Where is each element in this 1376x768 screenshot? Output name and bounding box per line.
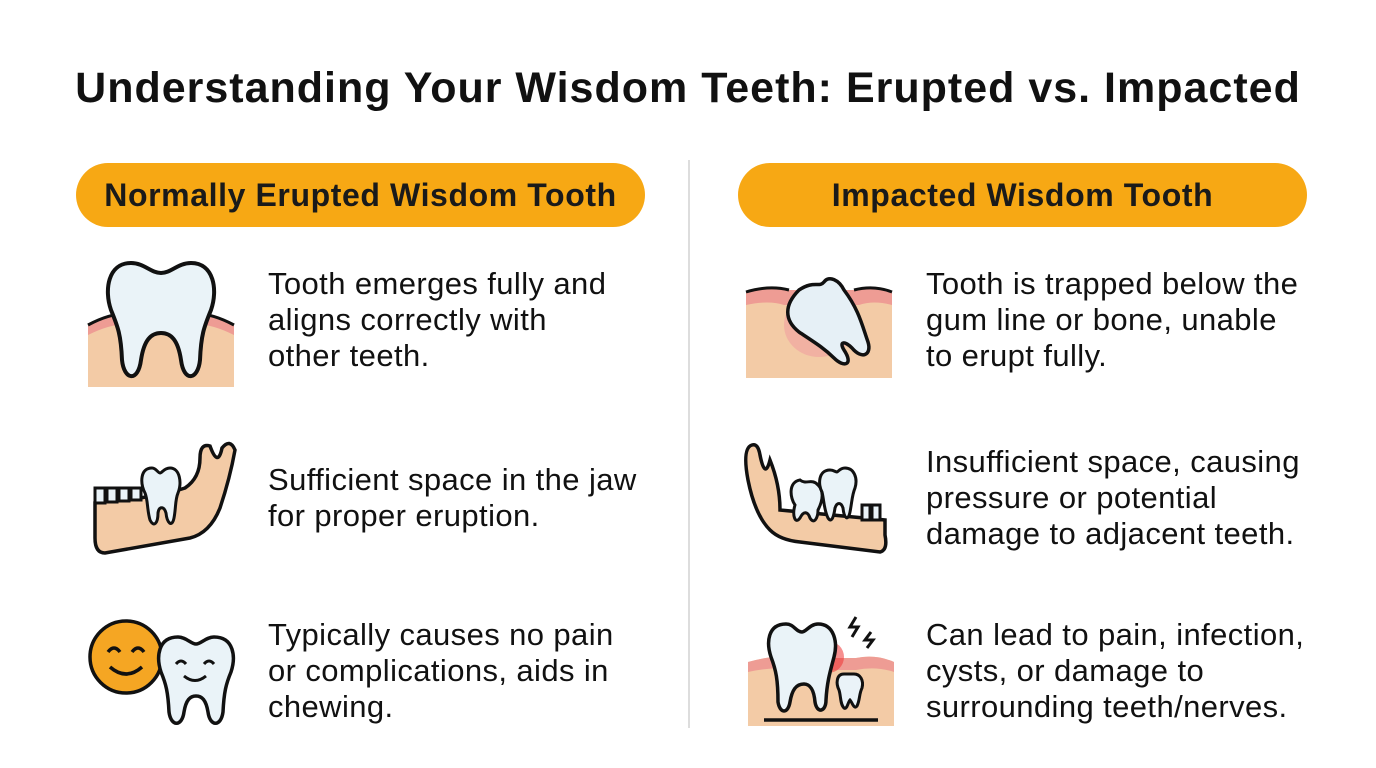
text: erupted 3 — [268, 617, 614, 724]
text: erupted 2 — [268, 462, 637, 533]
text: impacted 1 — [926, 266, 1298, 373]
icon: impacted tilted tooth — [746, 277, 892, 378]
title: Understanding Your Wisdom Teeth: Erupted vs. Impacted — [75, 64, 1301, 112]
text: erupted 2: Sufficient space in the jaw — [268, 462, 637, 497]
text: erupted 1 — [268, 266, 606, 373]
text: impacted 1: Tooth is trapped below the — [926, 266, 1298, 301]
icon: crowded jaw — [744, 443, 888, 554]
text: impacted 3: surrounding teeth/nerves. — [926, 689, 1288, 724]
icon: jaw with space — [93, 442, 237, 555]
text: impacted 3: Can lead to pain, infection, — [926, 617, 1304, 652]
text: erupted 3: chewing. — [268, 689, 394, 724]
text: erupted 3: or complications, aids in — [268, 653, 609, 688]
text: impacted 2: damage to adjacent teeth. — [926, 516, 1294, 551]
pill: erupted heading: Normally Erupted Wisdom Tooth — [104, 177, 617, 213]
text: impacted 2: Insufficient space, causing — [926, 444, 1300, 479]
text: impacted 1: gum line or bone, unable — [926, 302, 1277, 337]
pill: impacted heading — [738, 163, 1307, 227]
icon: pain and infection — [748, 616, 894, 726]
pill: erupted heading — [76, 163, 645, 227]
icon: erupted tooth in gum — [87, 261, 235, 387]
pill: impacted heading: Impacted Wisdom Tooth — [832, 177, 1213, 213]
text: impacted 1: to erupt fully. — [926, 338, 1107, 373]
text: erupted 3: Typically causes no pain — [268, 617, 614, 652]
text: erupted 1: aligns correctly with — [268, 302, 547, 337]
text: impacted 2: pressure or potential — [926, 480, 1217, 515]
text: erupted 1: other teeth. — [268, 338, 430, 373]
text: impacted 3 — [926, 617, 1304, 724]
text: impacted 2 — [926, 444, 1300, 551]
text: impacted 3: cysts, or damage to — [926, 653, 1204, 688]
text: erupted 2: for proper eruption. — [268, 498, 540, 533]
icon: smiley and happy tooth — [88, 619, 236, 725]
text: erupted 1: Tooth emerges fully and — [268, 266, 606, 301]
divider — [688, 160, 690, 728]
